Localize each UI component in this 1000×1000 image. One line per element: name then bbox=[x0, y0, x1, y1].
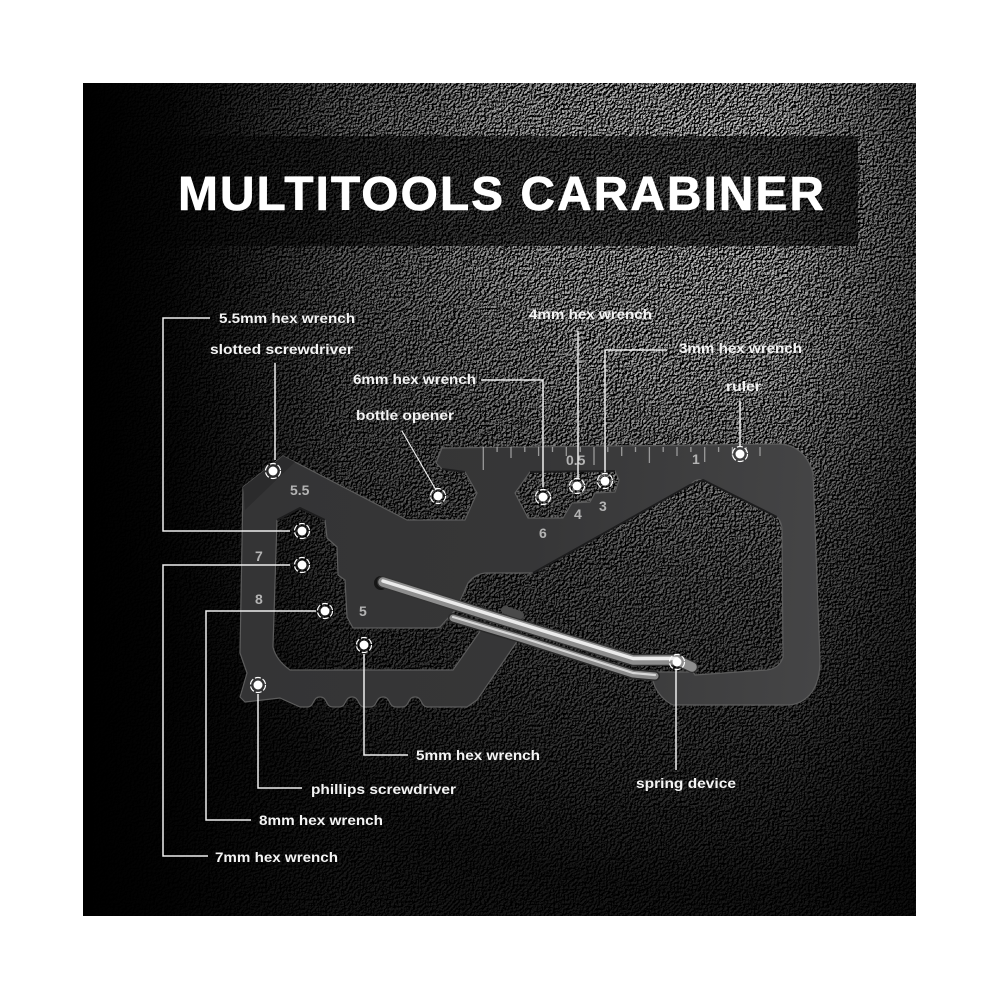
callout: 4mm hex wrench: 4mm hex wrench bbox=[529, 307, 652, 322]
callout: 6mm hex wrench bbox=[353, 372, 550, 504]
callout: phillips screwdriver bbox=[250, 678, 457, 797]
callout: 8mm hex wrench bbox=[206, 604, 383, 828]
callout: phillips screwdriver: phillips screwdriver bbox=[311, 782, 457, 797]
size number 5: 5 bbox=[359, 603, 367, 619]
callout: spring device bbox=[636, 654, 737, 791]
callout: slotted screwdriver: slotted screwdriver bbox=[210, 342, 354, 357]
slotted screwdriver bevel bbox=[243, 456, 295, 510]
callout: bottle opener bbox=[356, 408, 455, 504]
callout: ruler: ruler bbox=[726, 379, 762, 394]
callout: 7mm hex wrench: 7mm hex wrench bbox=[215, 850, 338, 865]
size number 7: 7 bbox=[255, 548, 263, 564]
size number 4: 4 bbox=[574, 506, 582, 522]
callout: 5.5mm hex wrench bbox=[163, 311, 355, 538]
title banner bbox=[130, 136, 858, 246]
callout: spring device: spring device bbox=[636, 776, 737, 791]
callout: 3mm hex wrench bbox=[598, 341, 802, 488]
callout: 4mm hex wrench bbox=[529, 307, 652, 494]
callout: 5mm hex wrench bbox=[356, 638, 540, 763]
inner shadow edge bbox=[277, 469, 777, 573]
background panel: dark textured surface bbox=[83, 83, 916, 916]
spring device wire bbox=[374, 576, 692, 676]
carabiner multitool body bbox=[240, 444, 820, 707]
size number 8: 8 bbox=[255, 591, 263, 607]
callout: 8mm hex wrench: 8mm hex wrench bbox=[259, 813, 383, 828]
callout: ruler bbox=[726, 379, 762, 462]
title: MULTITOOLS CARABINER bbox=[178, 168, 824, 221]
callout: slotted screwdriver bbox=[210, 342, 354, 478]
size number 5.5: 5.5 bbox=[290, 482, 310, 498]
ruler ticks bbox=[483, 447, 760, 470]
ruler number 1: 1 bbox=[692, 451, 700, 467]
callout: 5.5mm hex wrench: 5.5mm hex wrench bbox=[219, 311, 355, 326]
callout: 3mm hex wrench: 3mm hex wrench bbox=[679, 341, 802, 356]
callout: 6mm hex wrench: 6mm hex wrench bbox=[353, 372, 476, 387]
callout: 5mm hex wrench: 5mm hex wrench bbox=[416, 748, 540, 763]
size number 3: 3 bbox=[599, 498, 607, 514]
callout: bottle opener: bottle opener bbox=[356, 408, 455, 423]
size number 6: 6 bbox=[539, 525, 547, 541]
ruler number 0.5: 0.5 bbox=[566, 452, 586, 468]
callout: 7mm hex wrench bbox=[163, 558, 338, 865]
